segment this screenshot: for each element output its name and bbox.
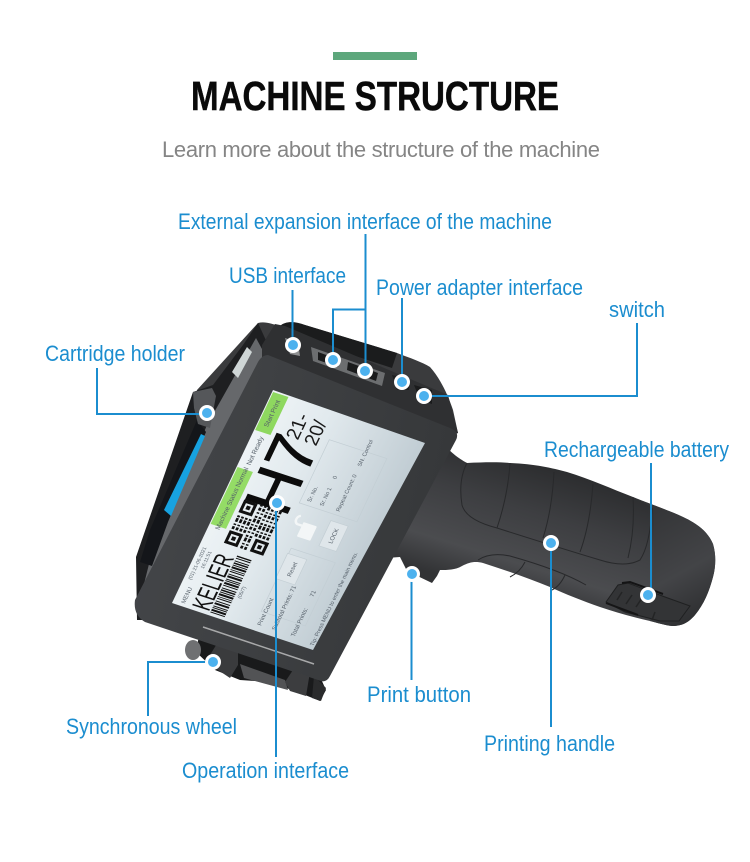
barcode number: (05/7) <box>237 586 248 600</box>
label: printing handle: Printing handle <box>484 731 615 756</box>
black rear strap <box>280 322 397 368</box>
battery latch <box>606 582 690 621</box>
serial panel: Repeat Count: 0 <box>336 474 359 512</box>
printing handle <box>360 440 715 626</box>
QR code <box>224 499 284 556</box>
lock icon <box>289 515 319 541</box>
reset button <box>276 553 307 585</box>
serial panel: 0 <box>332 475 339 480</box>
screen content <box>174 392 414 647</box>
counter panel: Subtotal Prints: 71 <box>272 585 298 631</box>
serial panel <box>299 428 392 522</box>
button: start print: Start Print <box>263 399 282 428</box>
subtitle: Learn more about the structure of the machine <box>162 137 600 162</box>
power socket and switch <box>392 375 410 390</box>
large H7 print: H7 <box>230 426 334 523</box>
title: MACHINE STRUCTURE <box>191 73 559 119</box>
serial panel: Sr. No 1 <box>319 487 334 507</box>
ethernet ports <box>311 347 385 386</box>
cartridge clip <box>193 388 216 428</box>
date print line two: 20/ <box>301 417 332 448</box>
lock button: LOCK <box>328 528 341 545</box>
wheel assembly <box>185 630 326 701</box>
lock button <box>319 521 348 551</box>
time text: 16:11:51 <box>200 550 214 570</box>
label: rechargeable battery: Rechargeable battery <box>544 437 729 462</box>
label: print button: Print button <box>367 682 471 707</box>
barcode <box>217 558 244 615</box>
handle end cap <box>633 497 715 626</box>
serial panel: SN. Control <box>357 439 375 467</box>
marker dots <box>200 338 654 668</box>
label: power adapter interface: Power adapter interface <box>376 275 583 300</box>
brand print sample: KELIER <box>186 550 240 614</box>
menu label: MENU <box>181 587 194 605</box>
label: operation interface: Operation interface <box>182 758 349 783</box>
date print: 21- <box>282 411 314 442</box>
front bezel <box>135 355 457 681</box>
top panel with ports <box>262 324 458 433</box>
button: start print <box>255 392 288 435</box>
label: synchronous wheel: Synchronous wheel <box>66 714 237 739</box>
counter panel <box>255 548 335 639</box>
status: not ready: Not Ready <box>246 435 266 466</box>
serial panel: Sr. No. <box>307 485 320 503</box>
date text: (01) 21-06-2021 <box>187 546 209 581</box>
reset button: Reset <box>287 561 300 578</box>
touch screen <box>172 390 425 650</box>
label: switch: switch <box>609 297 665 322</box>
hinge bracket <box>203 627 314 664</box>
leader lines <box>97 234 651 757</box>
side body and cartridge <box>136 323 275 620</box>
printer device <box>135 322 715 701</box>
cartridge blue stripe <box>164 434 205 516</box>
accent bar <box>333 52 417 60</box>
counter panel: 71 <box>310 589 318 598</box>
status: machine normal: Machine Status Normal <box>215 466 251 531</box>
label: usb interface: USB interface <box>229 263 346 288</box>
label: cartridge holder: Cartridge holder <box>45 341 185 366</box>
label: external expansion interface: External expansion interface of the machine <box>178 209 552 234</box>
counter panel: Total Prints: <box>291 607 310 638</box>
grip panel seams <box>461 463 652 590</box>
counter panel: Print Count <box>257 597 276 627</box>
tip text: Tip: Press MENU to enter the main menu. <box>310 551 360 647</box>
rear housing <box>197 322 458 470</box>
